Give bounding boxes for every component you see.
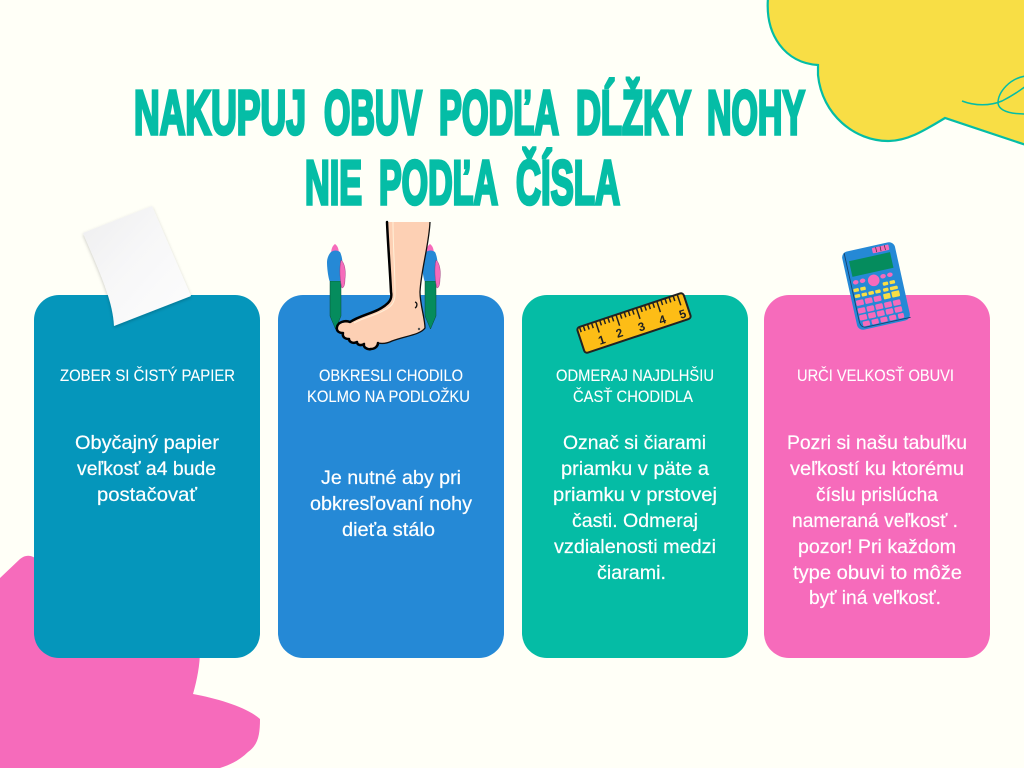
heading 2: OBKRESLI CHODILO xyxy=(319,366,463,385)
body text 1 xyxy=(75,432,220,506)
body text 3: časti. Odmeraj xyxy=(572,510,698,532)
icon: foot xyxy=(337,222,430,349)
icon: ruler: 2 xyxy=(614,325,625,341)
body text 3: priamku v prstovej xyxy=(553,484,717,506)
icon: calculator xyxy=(841,241,911,331)
decorative blob: yellow top right xyxy=(768,0,1024,145)
body text 3: vzdialenosti medzi xyxy=(554,536,716,558)
card background 2 xyxy=(278,295,504,658)
title: ČÍSLA xyxy=(516,149,620,218)
body text 1: Obyčajný papier xyxy=(75,432,220,454)
heading 1: ZOBER SI ČISTÝ PAPIER xyxy=(60,366,235,385)
title: NOHY xyxy=(707,79,805,148)
body text 4: veľkostí ku ktorému xyxy=(790,458,964,480)
panel: step 2 outline xyxy=(278,295,504,658)
title: NAKUPUJ xyxy=(134,79,306,148)
title: PODĽA xyxy=(379,149,498,218)
card background 1 xyxy=(34,295,260,658)
heading 2 xyxy=(307,366,470,406)
panel: step 3 measure xyxy=(522,295,748,658)
icon: ruler xyxy=(577,293,692,354)
title: OBUV xyxy=(324,79,422,148)
body text 1: veľkosť a4 bude xyxy=(77,458,216,480)
icon: left pen xyxy=(327,244,345,329)
body text 3 xyxy=(553,432,717,584)
heading 3: ODMERAJ NAJDLHŠIU xyxy=(556,366,714,385)
heading 3: ČASŤ CHODIDLA xyxy=(573,387,694,406)
title: NIE xyxy=(305,149,362,218)
panel: step 4 size xyxy=(764,295,990,658)
body text 4: Pozri si našu tabuľku xyxy=(787,432,967,454)
icon: sheet of paper xyxy=(83,206,191,326)
heading 3 xyxy=(556,366,714,406)
heading 4: URČI VELKOSŤ OBUVI xyxy=(797,366,954,385)
heading 2: KOLMO NA PODLOŽKU xyxy=(307,387,470,406)
body text 2 xyxy=(310,467,472,541)
body text 2: Je nutné aby pri xyxy=(321,467,461,489)
body text 2: dieťa stálo xyxy=(342,519,435,541)
body text 4: type obuvi to môže xyxy=(793,562,962,584)
card background 3 xyxy=(522,295,748,658)
body text 4 xyxy=(787,432,967,609)
body text 4: byť iná veľkosť. xyxy=(809,587,941,609)
icon: ruler: 4 xyxy=(657,312,668,328)
title: PODĽA xyxy=(439,79,559,148)
card background 4 xyxy=(764,295,990,658)
body text 3: priamku v päte a xyxy=(561,458,709,480)
icon: ruler: 3 xyxy=(636,319,647,334)
icon: ruler: 5 xyxy=(677,306,688,322)
body text 4: nameraná veľkosť . xyxy=(792,510,958,532)
title: DĹŽKY xyxy=(576,79,691,148)
icon: ruler: 1 xyxy=(596,332,607,348)
body text 3: Označ si čiarami xyxy=(563,432,706,454)
body text 4: číslu prislúcha xyxy=(816,484,938,506)
body text 4: pozor! Pri každom xyxy=(798,536,956,558)
panel: step 1 paper xyxy=(34,295,260,658)
body text 1: postačovať xyxy=(97,484,198,506)
body text 3: čiarami. xyxy=(597,562,666,584)
body text 2: obkresľovaní nohy xyxy=(310,493,472,515)
title xyxy=(134,79,805,218)
icon: right pen xyxy=(422,244,440,329)
decorative blob: pink bottom left xyxy=(0,556,260,768)
